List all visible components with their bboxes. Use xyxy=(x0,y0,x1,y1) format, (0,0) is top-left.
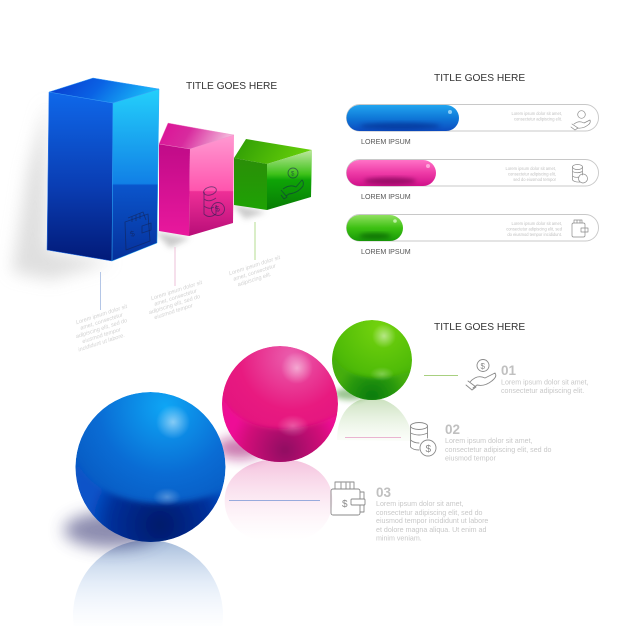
icon: hand with coin xyxy=(571,111,590,130)
sphere reflections xyxy=(73,398,412,626)
title: progress bars: TITLE GOES HERE xyxy=(434,73,525,84)
item 01: 01 xyxy=(501,363,517,378)
progress bar: blue: consectetur adipiscing elit. xyxy=(514,116,562,122)
icon: wallet xyxy=(125,212,151,250)
pink bar xyxy=(159,123,234,236)
blue bar xyxy=(47,78,159,261)
sphere shadows xyxy=(64,388,366,548)
caption: green bar: Lorem ipsum dolor sit xyxy=(228,255,281,277)
icon: wallet: $ xyxy=(129,229,136,239)
label: LOREM IPSUM xyxy=(361,193,411,201)
caption: green bar: amet, consectetur xyxy=(233,263,278,283)
progress bar: green: do eiusmod tempor incididunt. xyxy=(507,232,562,237)
icon: wallet xyxy=(572,220,588,237)
bar shadow xyxy=(12,100,266,280)
title: bar chart: TITLE GOES HERE xyxy=(186,81,277,92)
progress bar: green: Lorem ipsum dolor sit amet, xyxy=(511,221,562,226)
sphere: green xyxy=(332,320,412,402)
item 01: $ xyxy=(480,362,486,371)
item 03: Lorem ipsum dolor sit amet, xyxy=(376,500,464,508)
item 03: $ xyxy=(342,499,348,510)
green bar xyxy=(234,139,312,210)
sphere: blue xyxy=(76,392,226,545)
progress bar: green: consectetur adipiscing elit, sed xyxy=(506,226,563,232)
progress bar: blue: Lorem ipsum dolor sit amet, xyxy=(511,111,562,116)
title: spheres: TITLE GOES HERE xyxy=(434,322,525,333)
progress bar: pink: sed do eiusmod tempor xyxy=(513,177,557,182)
label: LOREM IPSUM xyxy=(361,248,411,256)
caption: green bar xyxy=(229,256,280,286)
caption: pink bar: eiusmod tempor xyxy=(154,303,195,321)
bar chart: 3D bars xyxy=(12,78,312,280)
bar captions xyxy=(75,222,281,353)
caption: blue bar: incididunt ut labore. xyxy=(78,333,126,353)
reflection: green xyxy=(338,399,412,438)
caption: blue bar xyxy=(75,304,128,353)
caption: blue bar: eiusmod tempor xyxy=(82,327,123,345)
item 03: 03 xyxy=(376,485,392,500)
label: LOREM IPSUM xyxy=(361,138,411,146)
icon: coins: $ xyxy=(214,204,221,214)
caption: pink bar: Lorem ipsum dolor sit xyxy=(150,280,203,302)
progress bar: green xyxy=(346,214,598,241)
item 01: Lorem ipsum dolor sit amet, xyxy=(501,378,589,386)
item 03: minim veniam. xyxy=(376,534,422,542)
progress bar: pink xyxy=(346,160,598,186)
icon: coins xyxy=(572,164,588,183)
item 02: consectetur adipiscing elit, sed do xyxy=(445,446,552,454)
item 01 xyxy=(424,360,589,395)
caption: green bar: adipiscing elit. xyxy=(237,272,272,288)
caption: pink bar: adipiscing elit, sed do xyxy=(148,294,201,316)
caption: blue bar: Lorem ipsum dolor sit xyxy=(75,304,128,326)
reflection: blue xyxy=(74,541,222,610)
progress bar: blue xyxy=(346,104,598,131)
progress bar: pink: Lorem ipsum dolor sit amet, xyxy=(505,166,556,171)
item 02: eiusmod tempor xyxy=(445,454,496,462)
icon: hand with coin: $ xyxy=(291,172,295,178)
icon: wallet xyxy=(331,482,365,515)
caption: blue bar: amet, consectetur xyxy=(80,312,125,332)
item 02: $ xyxy=(426,444,432,455)
item 03: consectetur adipiscing elit, sed do xyxy=(376,509,483,517)
sphere: pink xyxy=(222,346,338,465)
item 02: Lorem ipsum dolor sit amet, xyxy=(445,437,533,445)
item 03: et dolore magna aliqua. Ut enim ad xyxy=(376,526,486,534)
icon: coins xyxy=(410,422,436,456)
item 03 xyxy=(229,482,488,542)
item 03: eiusmod tempor incididunt ut labore xyxy=(376,517,488,525)
item 02: 02 xyxy=(445,422,460,437)
reflection: pink xyxy=(224,460,332,520)
caption: pink bar xyxy=(148,280,203,321)
item 02 xyxy=(345,422,552,462)
icon: hand with coin xyxy=(466,360,496,390)
item 01: consectetur adipiscing elit. xyxy=(501,387,584,395)
progress bar: pink: consectetur adipiscing elit, xyxy=(508,172,556,176)
caption: blue bar: adipiscing elit, sed do xyxy=(75,318,128,340)
caption: pink bar: amet, consectetur xyxy=(154,288,199,308)
